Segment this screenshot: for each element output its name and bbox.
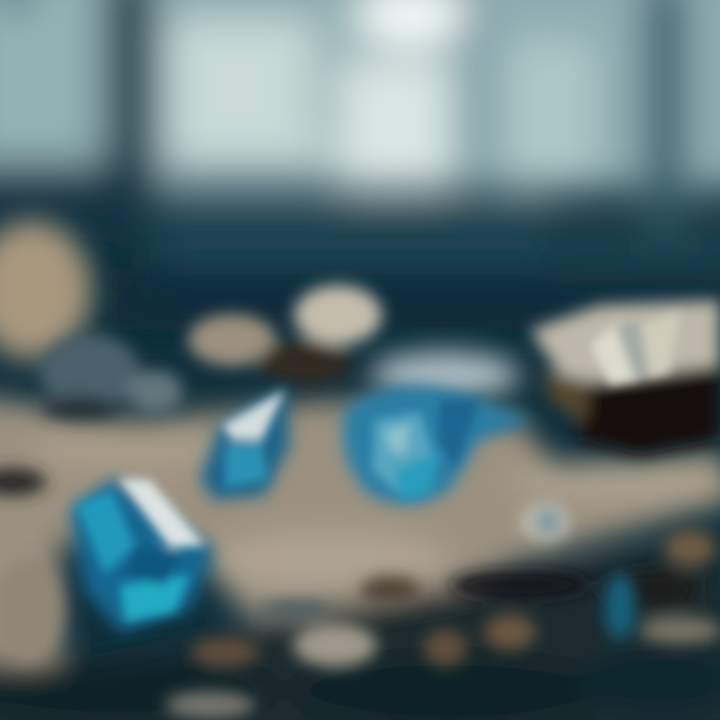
crystal: faint blue at lower right: [534, 508, 636, 640]
crystal: lower left turquoise: [70, 478, 215, 632]
crystal: small blue with white facet: [200, 385, 290, 500]
background: misty window and dark trunks: [0, 0, 720, 330]
rock: right pale slab with dark underside: [530, 300, 720, 455]
rocks: scattered brown pebbles: [0, 468, 720, 719]
crystal: central large blue: [343, 351, 535, 504]
rock: upper centre pale boulders: [40, 285, 382, 420]
rocks: sandy foreground ground: [0, 220, 720, 720]
